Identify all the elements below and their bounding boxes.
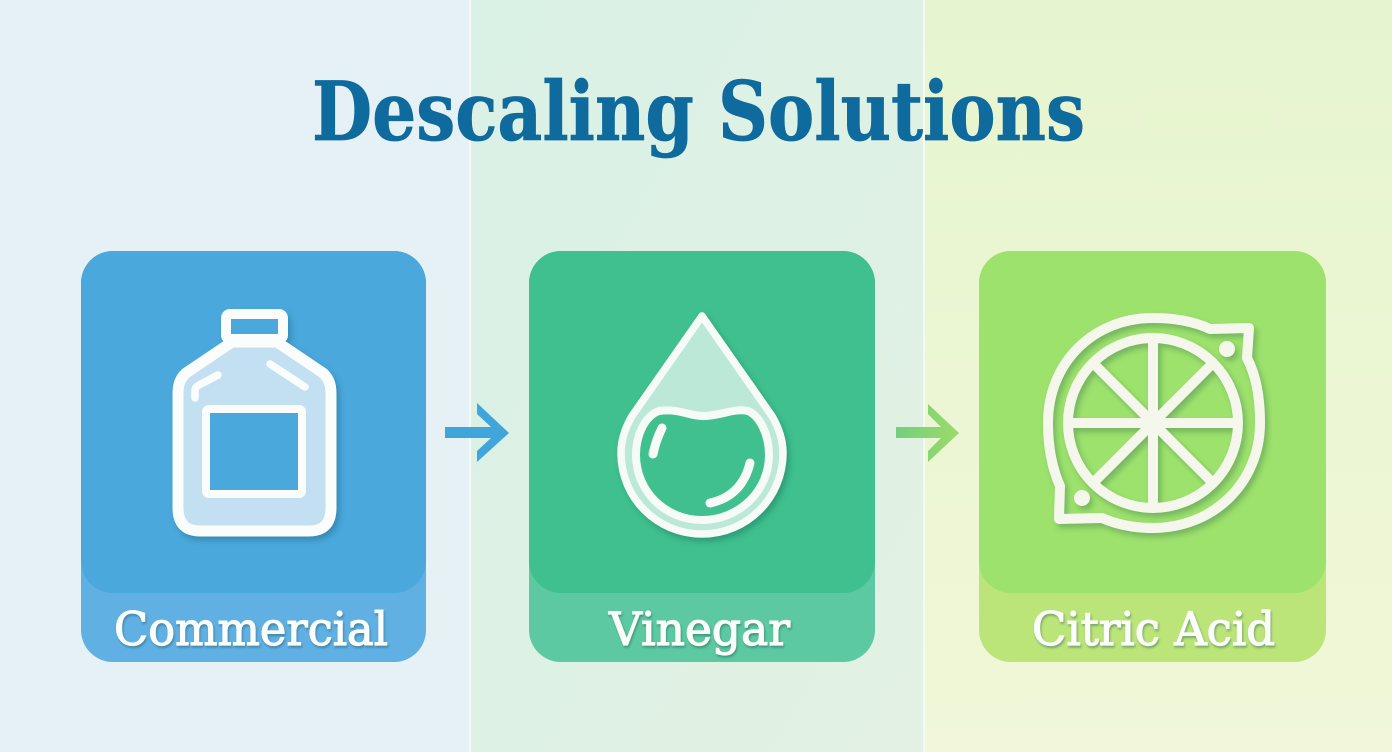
card: vinegar	[529, 251, 875, 662]
title: Descaling Solutions	[312, 65, 1085, 160]
icon: bottle	[178, 314, 331, 531]
panel: citric acid background	[924, 0, 1392, 752]
icon: lemon slice	[1048, 318, 1260, 528]
arrow: commercial to vinegar	[445, 403, 509, 462]
label: Citric Acid: Citric Acid	[1032, 602, 1275, 656]
card: commercial	[81, 251, 426, 662]
label: Vinegar: Vinegar	[608, 602, 790, 656]
panel: vinegar background	[470, 0, 924, 752]
label: Commercial: Commercial	[114, 602, 388, 656]
panel: commercial background	[0, 0, 470, 752]
card: citric acid	[979, 251, 1326, 662]
arrow: vinegar to citric acid	[896, 404, 959, 462]
icon: water drop	[621, 316, 783, 534]
